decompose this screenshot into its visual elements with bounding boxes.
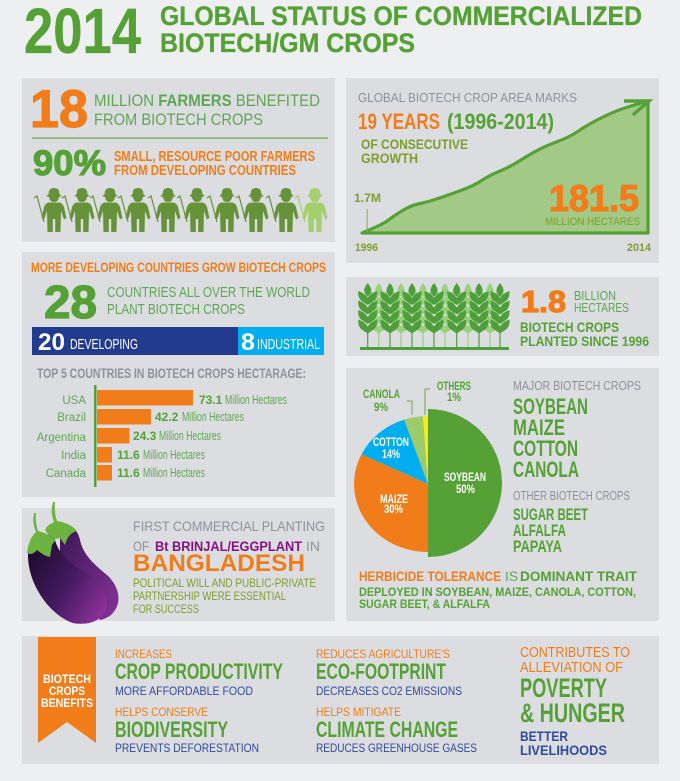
farmers benefited text: MILLION FARMERS BENEFITED [94, 91, 320, 110]
pie chart: 14% [382, 447, 400, 461]
benefit: poverty and hunger: POVERTY [520, 673, 607, 703]
herbicide tolerance text: DOMINANT TRAIT [520, 568, 637, 584]
benefit: biodiversity: BIODIVERSITY [115, 717, 228, 742]
split bar: developing vs industrial: 20 [38, 329, 65, 356]
countries text: PLANT BIOTECH CROPS [107, 301, 245, 318]
181.5 million hectares: 181.5 [549, 178, 639, 219]
icon: eggplants [27, 502, 118, 624]
pie chart: CANOLA [363, 387, 400, 401]
icons: ten farmers [34, 188, 328, 232]
pie chart: 30% [384, 502, 403, 516]
small farmers text [114, 149, 315, 179]
area chart [362, 101, 649, 233]
big number 28: 28 [44, 276, 97, 328]
ribbon: biotech crops benefits: BENEFITS [41, 698, 93, 710]
panel: benefits [22, 636, 659, 764]
benefit: climate change: CLIMATE CHANGE [316, 717, 458, 742]
bar chart: top 5 countries: 11.6 [117, 466, 140, 480]
split bar: developing vs industrial [32, 327, 324, 356]
major crops list: MAJOR BIOTECH CROPS [513, 378, 641, 393]
bar chart: top 5 countries: 73.1 [199, 393, 223, 407]
planted since 1996 [520, 319, 649, 349]
bar chart: top 5 countries: USA [62, 395, 86, 407]
benefit: poverty and hunger: ALLEVIATION OF [520, 659, 623, 676]
other crops list: OTHER BIOTECH CROPS [513, 488, 630, 503]
major crops list: COTTON [513, 436, 578, 461]
chart heading: GLOBAL BIOTECH CROP AREA MARKS [358, 90, 577, 105]
farmers benefited text [94, 91, 320, 129]
benefit: eco-footprint [316, 647, 462, 698]
benefit: crop productivity: MORE AFFORDABLE FOOD [115, 684, 253, 698]
bar chart: top 5 countries: Argentina [37, 432, 87, 444]
herbicide tolerance text: DEPLOYED IN SOYBEAN, MAIZE, CANOLA, COTTON, [359, 585, 636, 599]
pie chart: 9% [374, 400, 388, 414]
90 percent: 90% [33, 144, 106, 183]
benefit: climate change: HELPS MITIGATE [316, 705, 401, 719]
other crops list: ALFALFA [513, 522, 566, 540]
panel: Bangladesh [22, 502, 335, 624]
herbicide tolerance text: SUGAR BEET, & ALFALFA [359, 597, 490, 611]
other crops list: SUGAR BEET [513, 506, 588, 524]
panel: farmers [22, 78, 335, 242]
19 years: (1996-2014) [447, 109, 554, 134]
herbicide tolerance text [359, 568, 637, 611]
panel: developing countries [22, 252, 335, 497]
big number 18: 18 [30, 80, 88, 139]
benefit: climate change [316, 705, 477, 755]
title: BIOTECH/GM CROPS [160, 28, 415, 58]
panel: major crops [346, 368, 659, 621]
ribbon: biotech crops benefits: CROPS [49, 686, 85, 698]
ribbon: biotech crops benefits: BIOTECH [43, 674, 91, 686]
bar chart: top 5 countries: 42.2 [155, 410, 179, 424]
major crops list: MAIZE [513, 415, 565, 440]
small farmers text: FROM DEVELOPING COUNTRIES [114, 163, 296, 179]
billion hectares [574, 289, 629, 315]
bar chart: top 5 countries: 24.3 [133, 429, 157, 443]
consecutive growth: OF CONSECUTIVE [361, 136, 468, 152]
first commercial planting: OF [133, 538, 149, 554]
billion hectares: BILLION [574, 289, 616, 303]
bar chart: top 5 countries: Million Hectares [159, 428, 221, 443]
bar chart: top 5 countries: Million Hectares [182, 409, 244, 424]
pie chart: OTHERS [437, 379, 471, 393]
split bar: developing vs industrial: 8 [241, 329, 255, 356]
consecutive growth: GROWTH [361, 150, 418, 166]
pie chart: 1% [447, 390, 461, 404]
benefit: crop productivity [115, 647, 283, 698]
ribbon: biotech crops benefits [38, 637, 96, 743]
pie chart: 50% [456, 482, 475, 496]
benefit: eco-footprint: REDUCES AGRICULTURE'S [316, 647, 450, 661]
axis labels: 1996 [355, 242, 378, 254]
benefit: biodiversity [115, 705, 259, 755]
panel: area growth [346, 78, 659, 263]
major crops list: CANOLA [513, 457, 579, 482]
benefit: eco-footprint: ECO-FOOTPRINT [316, 659, 446, 684]
benefit: poverty and hunger [520, 644, 630, 758]
consecutive growth [361, 136, 468, 166]
major crops list [513, 378, 641, 482]
bar chart: top 5 countries: Million Hectares [143, 447, 205, 462]
pie chart [354, 379, 502, 557]
split bar: developing vs industrial: INDUSTRIAL [257, 336, 320, 353]
1.8: 1.8 [521, 284, 566, 319]
pie chart: MAIZE [380, 492, 408, 506]
19 years [358, 109, 554, 134]
title: GLOBAL STATUS OF COMMERCIALIZED [160, 1, 642, 31]
bar chart: top 5 countries: Brazil [57, 412, 86, 424]
first commercial planting: IN [306, 538, 320, 554]
Bangladesh: BANGLADESH [133, 550, 305, 577]
axis labels [354, 191, 652, 254]
countries text [107, 284, 310, 318]
181.5 million hectares: MILLION HECTARES [545, 216, 640, 228]
planted since 1996: PLANTED SINCE 1996 [520, 333, 649, 349]
benefit: biodiversity: HELPS CONSERVE [115, 705, 208, 719]
pie chart: SOYBEAN [444, 470, 486, 484]
planted since 1996: BIOTECH CROPS [520, 319, 619, 335]
bar chart: top 5 countries: Million Hectares [143, 465, 205, 480]
billion hectares: HECTARES [574, 301, 629, 315]
benefit: poverty and hunger: CONTRIBUTES TO [520, 644, 630, 661]
panel heading: MORE DEVELOPING COUNTRIES GROW BIOTECH CROPS [31, 260, 326, 275]
farmers benefited text: FROM BIOTECH CROPS [94, 110, 263, 129]
political will text [133, 576, 316, 616]
icon: wheat field [358, 283, 510, 350]
first commercial planting: Bt BRINJAL/EGGPLANT [155, 539, 303, 554]
benefit: poverty and hunger: & HUNGER [520, 698, 625, 728]
small farmers text: SMALL, RESOURCE POOR FARMERS [114, 149, 315, 165]
bar chart: top 5 countries: Million Hectares [225, 392, 287, 407]
axis labels: 1.7M [354, 191, 381, 205]
political will text: PARTNERSHIP WERE ESSENTIAL [133, 589, 286, 603]
major crops list: SOYBEAN [513, 394, 588, 419]
bar chart: top 5 countries: Canada [46, 468, 87, 480]
countries text: COUNTRIES ALL OVER THE WORLD [107, 284, 310, 301]
chart heading: TOP 5 COUNTRIES IN BIOTECH CROPS HECTARAGE: [37, 366, 306, 381]
bar chart: top 5 countries [37, 385, 287, 487]
political will text: POLITICAL WILL AND PUBLIC-PRIVATE [133, 576, 316, 590]
title [24, 0, 642, 67]
split bar: developing vs industrial: DEVELOPING [70, 336, 138, 353]
first commercial planting: FIRST COMMERCIAL PLANTING [133, 518, 325, 534]
other crops list: PAPAYA [513, 538, 562, 556]
herbicide tolerance text: IS [505, 568, 518, 584]
benefit: climate change: REDUCES GREENHOUSE GASES [316, 741, 477, 755]
benefit: biodiversity: PREVENTS DEFORESTATION [115, 741, 259, 755]
other crops list [513, 488, 630, 556]
pie chart: COTTON [373, 435, 409, 449]
bar chart: top 5 countries: India [61, 450, 87, 462]
19 years: 19 YEARS [358, 109, 440, 134]
benefit: crop productivity: CROP PRODUCTIVITY [115, 659, 283, 684]
first commercial planting [133, 518, 325, 554]
benefit: poverty and hunger: LIVELIHOODS [520, 742, 607, 758]
axis labels: 2014 [627, 242, 652, 254]
benefit: poverty and hunger: BETTER [520, 728, 568, 744]
benefit: eco-footprint: DECREASES CO2 EMISSIONS [316, 684, 462, 698]
benefit: crop productivity: INCREASES [115, 647, 172, 661]
panel: 1.8 billion hectares [346, 277, 659, 356]
herbicide tolerance text: HERBICIDE TOLERANCE [359, 568, 501, 584]
political will text: FOR SUCCESS [133, 602, 199, 616]
bar chart: top 5 countries: 11.6 [117, 448, 140, 462]
